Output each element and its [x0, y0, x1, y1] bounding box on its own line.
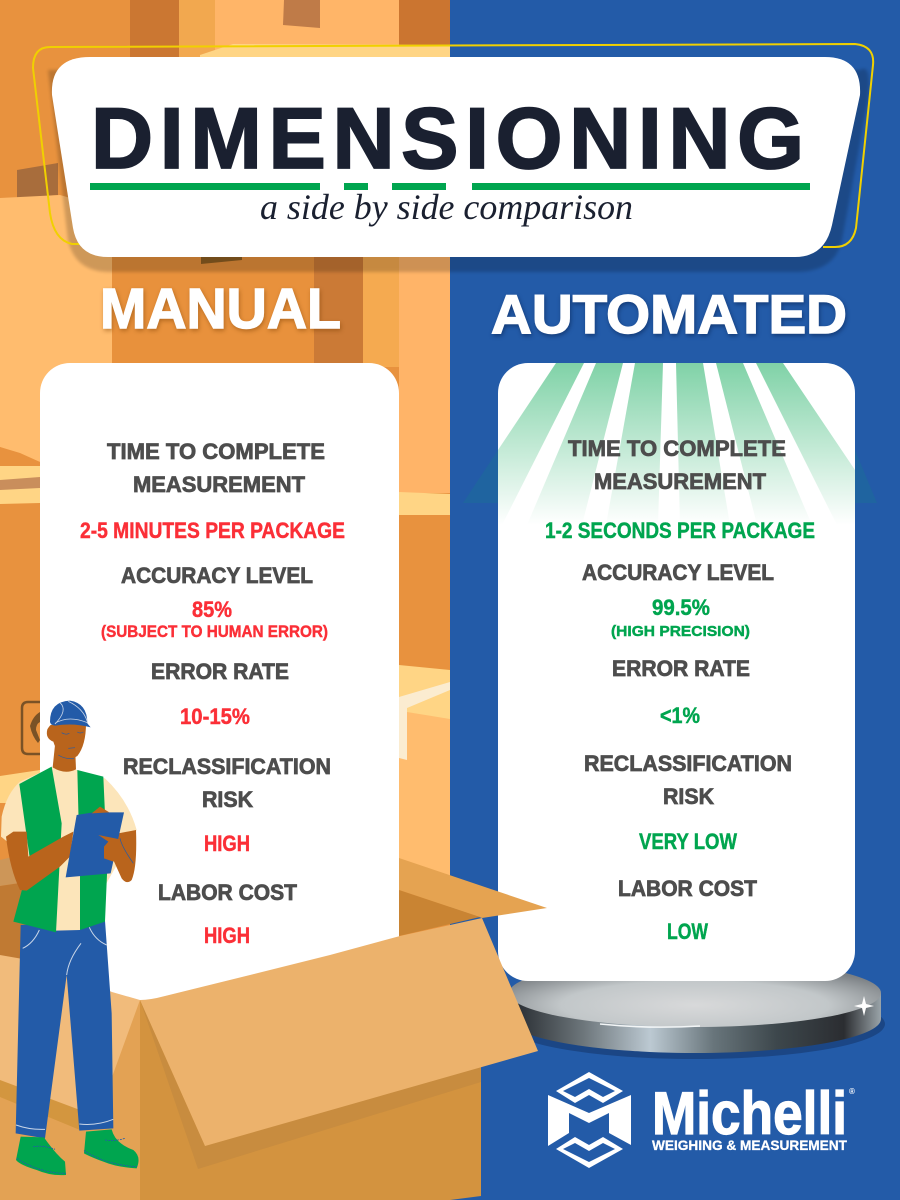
subtitle: a side by side comparison	[260, 187, 633, 227]
metric: reclassification risk: RECLASSIFICATION	[584, 751, 792, 776]
background: stacked cardboard boxes, manual side	[0, 0, 450, 1200]
metric: reclassification risk: RECLASSIFICATION	[123, 754, 331, 779]
metric: reclassification risk	[584, 751, 792, 854]
metric: error rate: ERROR RATE	[151, 659, 289, 684]
clipboard	[66, 812, 124, 877]
automated column text	[545, 436, 815, 944]
icon: this way up box sticker	[22, 702, 40, 754]
beam glow over blue	[463, 450, 877, 503]
panel: manual card	[40, 363, 399, 1023]
metric: error rate	[612, 656, 750, 728]
shoes	[16, 1129, 139, 1175]
metric: labor cost: HIGH	[204, 923, 250, 948]
neck	[53, 745, 76, 772]
metric: time to complete: TIME TO COMPLETE	[107, 439, 325, 464]
heading: manual: MANUAL	[100, 277, 341, 341]
metric: labor cost: LABOR COST	[158, 880, 298, 905]
metric: accuracy level	[582, 560, 774, 640]
metric: error rate: <1%	[660, 703, 700, 728]
metric: accuracy level: (HIGH PRECISION)	[611, 623, 750, 640]
metric: labor cost: LABOR COST	[618, 876, 758, 901]
title text: DIMENSIONING	[91, 91, 804, 187]
registered mark: ®	[849, 1087, 855, 1096]
metric: time to complete	[80, 439, 345, 543]
metric: time to complete: TIME TO COMPLETE	[568, 436, 786, 461]
metric: error rate: 10-15%	[180, 704, 250, 729]
yellow outline	[33, 44, 873, 247]
heading: automated: AUTOMATED	[491, 283, 847, 345]
metric: accuracy level: 85%	[192, 597, 232, 622]
platform: silver pedestal	[505, 959, 885, 1059]
metric: accuracy level	[101, 563, 328, 641]
metric: time to complete: MEASUREMENT	[594, 469, 767, 494]
scanner light beams	[498, 363, 855, 525]
metric: labor cost	[618, 876, 758, 944]
metric: accuracy level: (SUBJECT TO HUMAN ERROR)	[101, 622, 328, 641]
logo mark	[548, 1072, 631, 1168]
manual column text	[80, 439, 345, 948]
metric: labor cost: LOW	[667, 919, 708, 944]
banner body	[52, 57, 860, 257]
icon: sparkle	[854, 996, 874, 1016]
illustration: worker with clipboard	[1, 701, 139, 1175]
shirt	[1, 767, 137, 931]
metric: reclassification risk: VERY LOW	[639, 829, 737, 854]
tagline: WEIGHING & MEASUREMENT	[652, 1137, 847, 1153]
metric: time to complete: MEASUREMENT	[133, 472, 306, 497]
hand	[98, 835, 122, 862]
banner shadow	[48, 69, 869, 272]
metric: time to complete	[545, 436, 815, 543]
panel: automated card	[463, 363, 885, 1059]
background: blue automated side	[450, 0, 900, 1200]
logo: Michelli Weighing & Measurement	[548, 1072, 855, 1168]
metric: time to complete: 2-5 MINUTES PER PACKAGE	[80, 518, 345, 543]
metric: time to complete: 1-2 SECONDS PER PACKAGE	[545, 518, 815, 543]
metric: accuracy level: ACCURACY LEVEL	[582, 560, 774, 585]
metric: reclassification risk: HIGH	[204, 831, 250, 856]
metric: reclassification risk	[123, 754, 331, 856]
metric: reclassification risk: RISK	[202, 787, 253, 812]
metric: labor cost	[158, 880, 298, 948]
metric: accuracy level: ACCURACY LEVEL	[121, 563, 313, 588]
metric: error rate	[151, 659, 289, 729]
vest	[13, 767, 107, 932]
metric: accuracy level: 99.5%	[652, 595, 710, 620]
metric: error rate: ERROR RATE	[612, 656, 750, 681]
title banner	[33, 44, 873, 272]
arms	[6, 830, 136, 891]
illustration: open cardboard box	[0, 858, 547, 1200]
cap	[50, 701, 91, 727]
wordmark: Michelli	[652, 1080, 847, 1147]
green rule	[90, 183, 810, 190]
pants	[16, 921, 113, 1138]
metric: reclassification risk: RISK	[663, 784, 714, 809]
card body	[498, 363, 855, 981]
head	[47, 723, 86, 759]
